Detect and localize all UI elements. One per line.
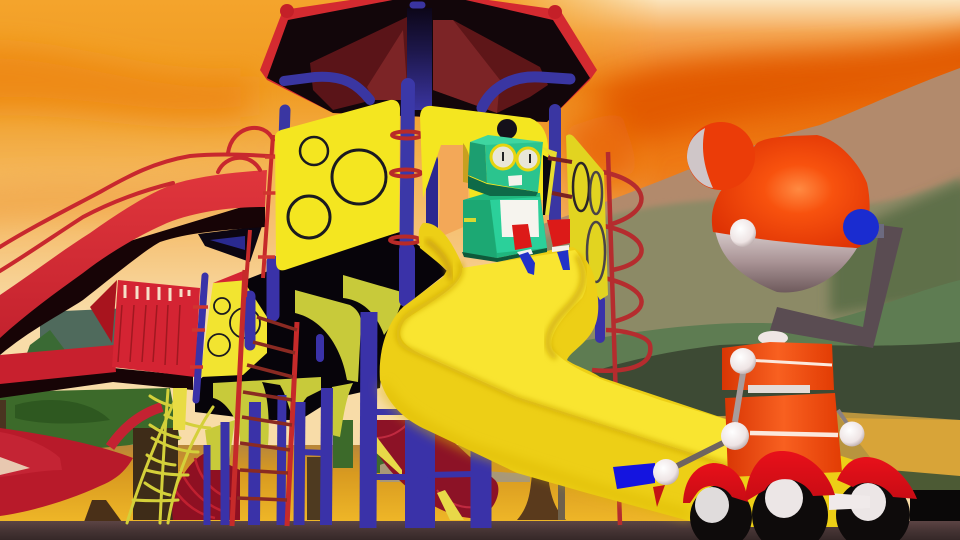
lower yellow panel	[200, 271, 267, 377]
robot neck shadow	[468, 176, 538, 196]
ground, trees and floor	[0, 330, 960, 540]
red robot body	[613, 331, 917, 540]
slide creases	[398, 262, 745, 470]
red roof	[260, 0, 597, 122]
ear	[687, 122, 755, 190]
right side yellow panel	[566, 134, 608, 300]
upper left yellow panel	[275, 100, 400, 270]
right red spiral climber	[592, 152, 650, 525]
black structure underside	[195, 232, 448, 420]
head lower silver shell	[715, 230, 857, 292]
green robot on the slide	[462, 119, 570, 275]
dark bracket under slide	[198, 226, 262, 262]
side knob	[730, 219, 756, 247]
yellow slide	[380, 223, 860, 527]
red mudguards	[683, 451, 917, 503]
red slatted box	[90, 280, 200, 377]
red ladders	[190, 135, 297, 526]
mountains	[40, 68, 960, 490]
red robot flying head	[687, 122, 884, 292]
red pole rings	[390, 132, 422, 244]
blue support poles	[196, 250, 600, 528]
robot mouth	[508, 175, 522, 186]
wheels	[690, 477, 910, 540]
lower-left red tube	[0, 407, 162, 516]
blue nozzle	[843, 209, 884, 245]
neck knob	[758, 331, 788, 345]
robot left leg	[512, 224, 535, 275]
blue roof poles and arches	[284, 5, 570, 300]
lower barrel	[725, 393, 842, 477]
robot eyes	[491, 145, 539, 170]
robot body	[462, 192, 547, 262]
robot arm	[613, 348, 864, 507]
yellow ladder	[127, 388, 213, 523]
back yellow panel	[420, 106, 557, 238]
grey arm bracket	[770, 225, 903, 348]
red beam under box	[0, 345, 193, 398]
upper barrel	[722, 342, 834, 390]
slide channel surface	[400, 250, 745, 470]
robot antenna	[497, 119, 517, 139]
left red tube slide	[0, 128, 283, 355]
robot head	[468, 135, 543, 192]
silver waist	[748, 385, 810, 393]
robot right leg	[547, 219, 570, 270]
head ball	[712, 135, 870, 248]
slide handrails	[0, 128, 283, 274]
lower red tubes	[172, 420, 498, 520]
yellow-green arches	[205, 275, 405, 470]
right pole rings	[548, 158, 572, 197]
